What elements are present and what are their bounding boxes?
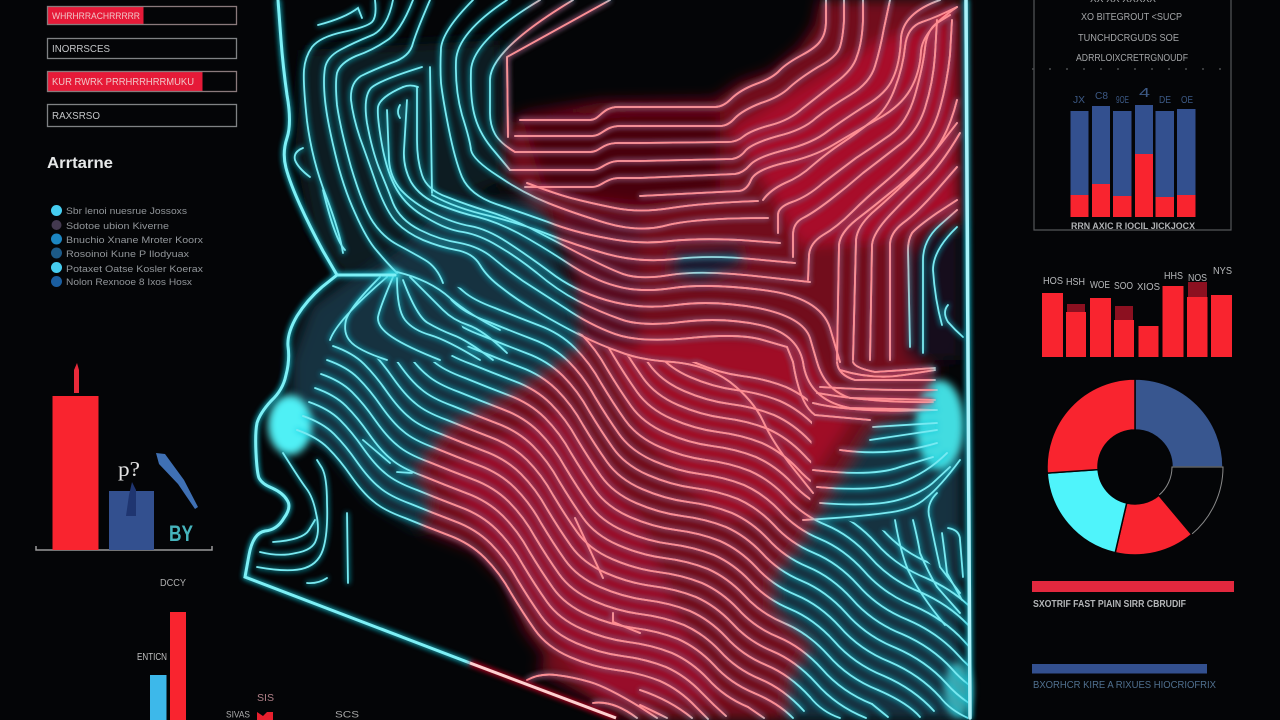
status bar 2 xyxy=(48,38,236,58)
label p?: p? xyxy=(118,457,140,481)
bar labels: WOE xyxy=(1090,280,1110,291)
status bar 4: RAXSRSO xyxy=(52,110,100,122)
dark bar caps xyxy=(1067,282,1207,320)
bar value labels: C8 xyxy=(1095,91,1108,102)
header text: TUNCHDCRGUDS SOE xyxy=(1078,32,1179,44)
label: SIS xyxy=(257,693,274,704)
blue bar xyxy=(109,491,154,550)
label: ENTICN xyxy=(137,651,167,663)
bar labels: HHS xyxy=(1164,271,1183,282)
contour lines red overlay xyxy=(412,0,964,720)
red bar chart right xyxy=(1042,266,1232,357)
frame xyxy=(1034,0,1231,230)
header text: ADRRLOIXCRETRGNOUDF xyxy=(1076,52,1188,64)
red bars xyxy=(1042,286,1232,357)
red bar xyxy=(52,396,98,550)
map outline xyxy=(245,0,970,718)
label: DCCY xyxy=(160,578,186,589)
segment cyan xyxy=(1047,470,1127,553)
legend item 2: Sdotoe ubion Kiverne xyxy=(66,221,169,232)
status bar 2: INORRSCES xyxy=(52,43,110,55)
bar labels: NYS xyxy=(1213,266,1232,277)
status bar 1 xyxy=(48,6,236,24)
bar value labels: 4 xyxy=(1139,85,1150,100)
contour map panel xyxy=(245,0,1056,720)
heading: Arrtarne xyxy=(47,155,113,172)
bar labels: XIOS xyxy=(1137,282,1160,293)
legend item 3: Bnuchio Xnane Mroter Koorx xyxy=(66,235,203,246)
contour lines cyan xyxy=(253,0,968,720)
red bar xyxy=(170,612,186,720)
panel: top-right stacked chart xyxy=(1032,0,1231,232)
status bar 4 xyxy=(48,104,236,126)
axis xyxy=(36,546,212,550)
red legend bar xyxy=(1032,581,1234,610)
legend list xyxy=(51,205,203,288)
status bar 3 xyxy=(48,72,236,92)
segment empty xyxy=(1159,467,1223,534)
bar chart left xyxy=(36,363,212,550)
legend item 6: Nolon Rexnooe 8 Ixos Hosx xyxy=(66,277,192,288)
small red bar xyxy=(257,712,273,720)
bar labels: NOS xyxy=(1188,273,1207,284)
bar value labels: JX xyxy=(1073,95,1085,106)
dotted axis xyxy=(1032,68,1230,70)
bar value labels: 9OE xyxy=(1116,95,1129,106)
red bar marker xyxy=(74,363,79,393)
legend item 5: Potaxet Oatse Kosler Koerax xyxy=(66,264,203,275)
legend item 1: Sbr lenoi nuesrue Jossoxs xyxy=(66,206,187,217)
segment blue xyxy=(1135,379,1223,467)
bar value labels xyxy=(1073,85,1193,106)
legend item 4 xyxy=(51,248,189,260)
bar labels: SOO xyxy=(1114,281,1133,292)
blue legend bar: BXORHCR KIRE A RIXUES HIOCRIOFRIX xyxy=(1033,679,1216,691)
blue legend bar xyxy=(1032,664,1216,691)
label BY: BY xyxy=(169,521,193,546)
segment red upper xyxy=(1047,379,1135,473)
blue bar marker xyxy=(126,482,136,516)
header text xyxy=(1076,0,1188,64)
status bar 3: KUR RWRK PRRHRRHRRMUKU xyxy=(52,77,194,88)
donut chart xyxy=(1047,379,1223,555)
status bar 1: WHRHRRACHRRRRR xyxy=(52,11,140,22)
bar value labels: DE xyxy=(1159,95,1171,106)
label: SIVAS xyxy=(226,710,250,720)
bar labels xyxy=(1043,266,1232,293)
bar labels: HSH xyxy=(1066,277,1085,288)
blue stroke icon xyxy=(156,453,198,509)
legend item 4: Rosoinoi Kune P Ilodyuax xyxy=(66,249,189,260)
bar labels: HOS xyxy=(1043,276,1063,287)
red legend bar: SXOTRIF FAST PIAIN SIRR CBRUDIF xyxy=(1033,598,1186,610)
axis label: RRN AXIC R IOCIL JICKJOCX xyxy=(1071,221,1196,232)
small bottom labels xyxy=(226,693,359,720)
legend item 5 xyxy=(51,262,203,275)
panel: top-left status bars xyxy=(48,6,236,126)
segment red lower xyxy=(1115,495,1192,555)
bar value labels: OE xyxy=(1181,95,1193,106)
bar chart bottom-left xyxy=(137,578,186,720)
label: SCS xyxy=(335,710,359,720)
header text: XO BITEGROUT <SUCP xyxy=(1081,11,1182,23)
stacked bars xyxy=(1070,105,1196,217)
glow hot spots xyxy=(268,269,972,718)
map colour fields xyxy=(290,0,962,720)
cyan bar xyxy=(150,675,166,720)
map diagonal edge red section xyxy=(470,663,616,718)
